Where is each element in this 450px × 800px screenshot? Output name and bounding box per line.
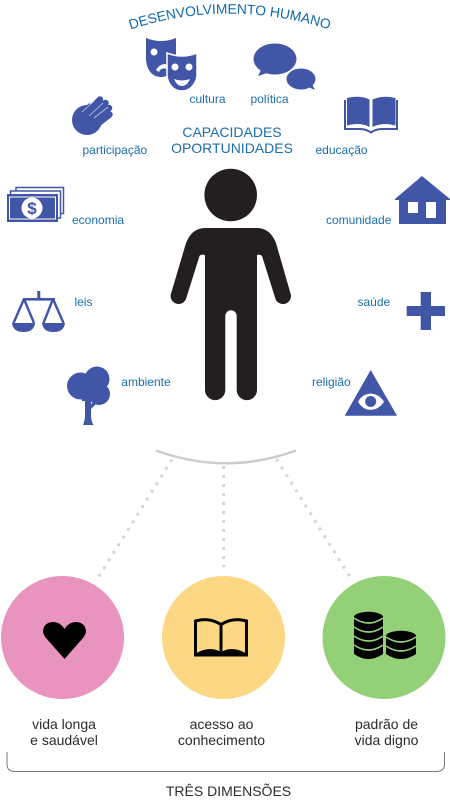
icon: coin stacks (354, 612, 416, 659)
label: três dimensões: TRÊS DIMENSÕES (166, 783, 291, 799)
circle: conhecimento (162, 576, 285, 699)
bracket (7, 752, 444, 772)
label: economia: economia (72, 213, 124, 227)
icon: all-seeing eye (345, 370, 397, 416)
icon: banknotes: $ (27, 199, 37, 218)
icon: open book (345, 97, 397, 132)
label: leis: leis (74, 295, 93, 309)
icon: banknotes (7, 188, 64, 222)
icon: plus (407, 292, 445, 330)
arc under person (156, 450, 296, 463)
label: vida longa e saudável: vida longa (32, 716, 96, 732)
circle: vida longa (1, 576, 124, 699)
label: vida longa e saudável (30, 716, 98, 748)
circle: padrão de vida (322, 576, 446, 699)
title: desenvolvimento humano: DESENVOLVIMENTO HUMANO (128, 4, 330, 30)
dotted connectors (98, 459, 350, 577)
icon: person (171, 169, 291, 400)
label: participação: participação (82, 143, 148, 157)
icon: speech bubbles (254, 44, 316, 90)
icon: black book (195, 620, 247, 656)
label: comunidade: comunidade (326, 213, 392, 227)
label: educação: educação (316, 143, 368, 157)
label: vida longa e saudável: e saudável (30, 732, 98, 748)
icon: hand (72, 100, 110, 135)
heading: capacidades oportunidades (171, 124, 293, 156)
label: padrão de vida digno: vida digno (355, 732, 419, 748)
label: padrão de vida digno: padrão de (355, 716, 418, 732)
label: ambiente: ambiente (121, 375, 171, 389)
heading: capacidades oportunidades: OPORTUNIDADES (171, 140, 293, 156)
label: padrão de vida digno (355, 716, 419, 748)
label: religião: religião (312, 375, 351, 389)
label: acesso ao conhecimento (178, 716, 265, 748)
label: acesso ao conhecimento: acesso ao (190, 716, 254, 732)
icon: heart (43, 622, 86, 659)
label: cultura: cultura (190, 92, 226, 106)
heading: capacidades oportunidades: CAPACIDADES (182, 124, 282, 140)
icon: house (395, 176, 450, 224)
label: saúde: saúde (358, 295, 391, 309)
icon: balance scales (12, 291, 65, 332)
icon: theatre masks (146, 38, 197, 91)
label: acesso ao conhecimento: conhecimento (178, 732, 265, 748)
icon: tree (67, 366, 110, 425)
label: política: política (250, 92, 289, 106)
